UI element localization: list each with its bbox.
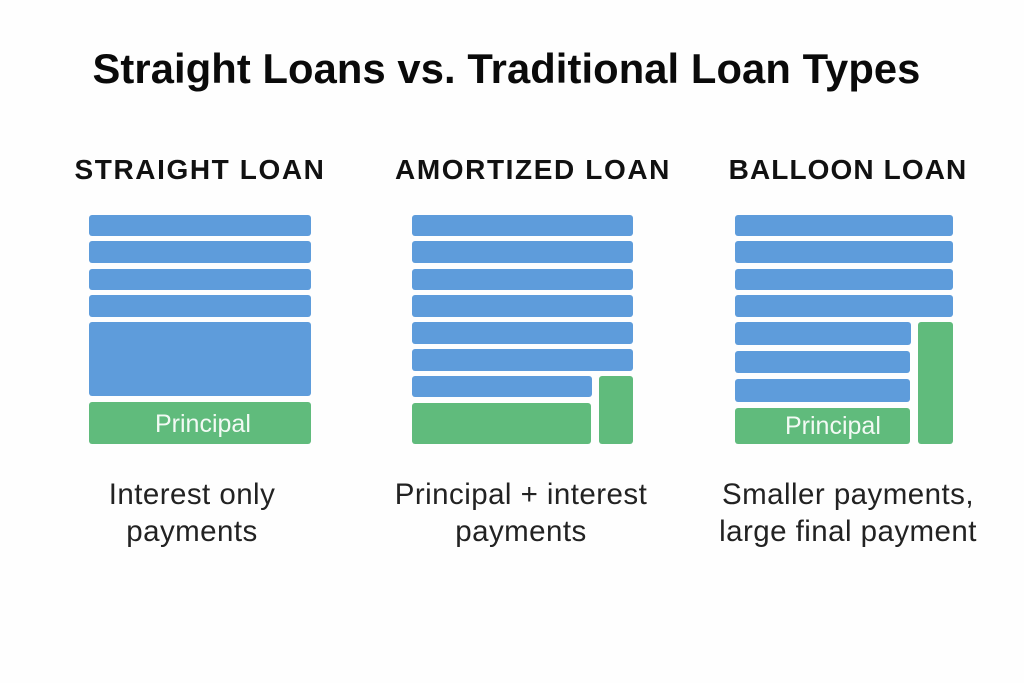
description: straight loan: Interest only bbox=[109, 478, 275, 511]
description: balloon loan: Smaller payments, bbox=[722, 478, 974, 511]
principal block bbox=[412, 403, 591, 444]
principal label: Principal bbox=[785, 412, 881, 440]
description: straight loan bbox=[109, 478, 275, 548]
principal label: Principal bbox=[155, 410, 251, 438]
description: balloon loan: large final payment bbox=[719, 515, 977, 548]
final principal column bbox=[599, 376, 633, 444]
chart: balloon loan stack bbox=[735, 215, 953, 444]
description: straight loan: payments bbox=[126, 515, 258, 548]
description: amortized loan bbox=[395, 478, 647, 548]
chart: straight loan stack bbox=[89, 215, 311, 444]
heading: balloon loan: BALLOON LOAN bbox=[729, 154, 967, 185]
principal block bbox=[89, 402, 311, 444]
description: amortized loan: payments bbox=[455, 515, 587, 548]
balloon principal column bbox=[918, 322, 953, 444]
heading: amortized loan: AMORTIZED LOAN bbox=[395, 154, 671, 185]
title: Straight Loans vs. Traditional Loan Types bbox=[93, 45, 920, 92]
description: balloon loan bbox=[719, 478, 977, 548]
chart: amortized loan stack bbox=[412, 215, 633, 444]
heading: straight loan: STRAIGHT LOAN bbox=[74, 154, 326, 185]
principal block bbox=[735, 408, 910, 444]
description: amortized loan: Principal + interest bbox=[395, 478, 647, 511]
